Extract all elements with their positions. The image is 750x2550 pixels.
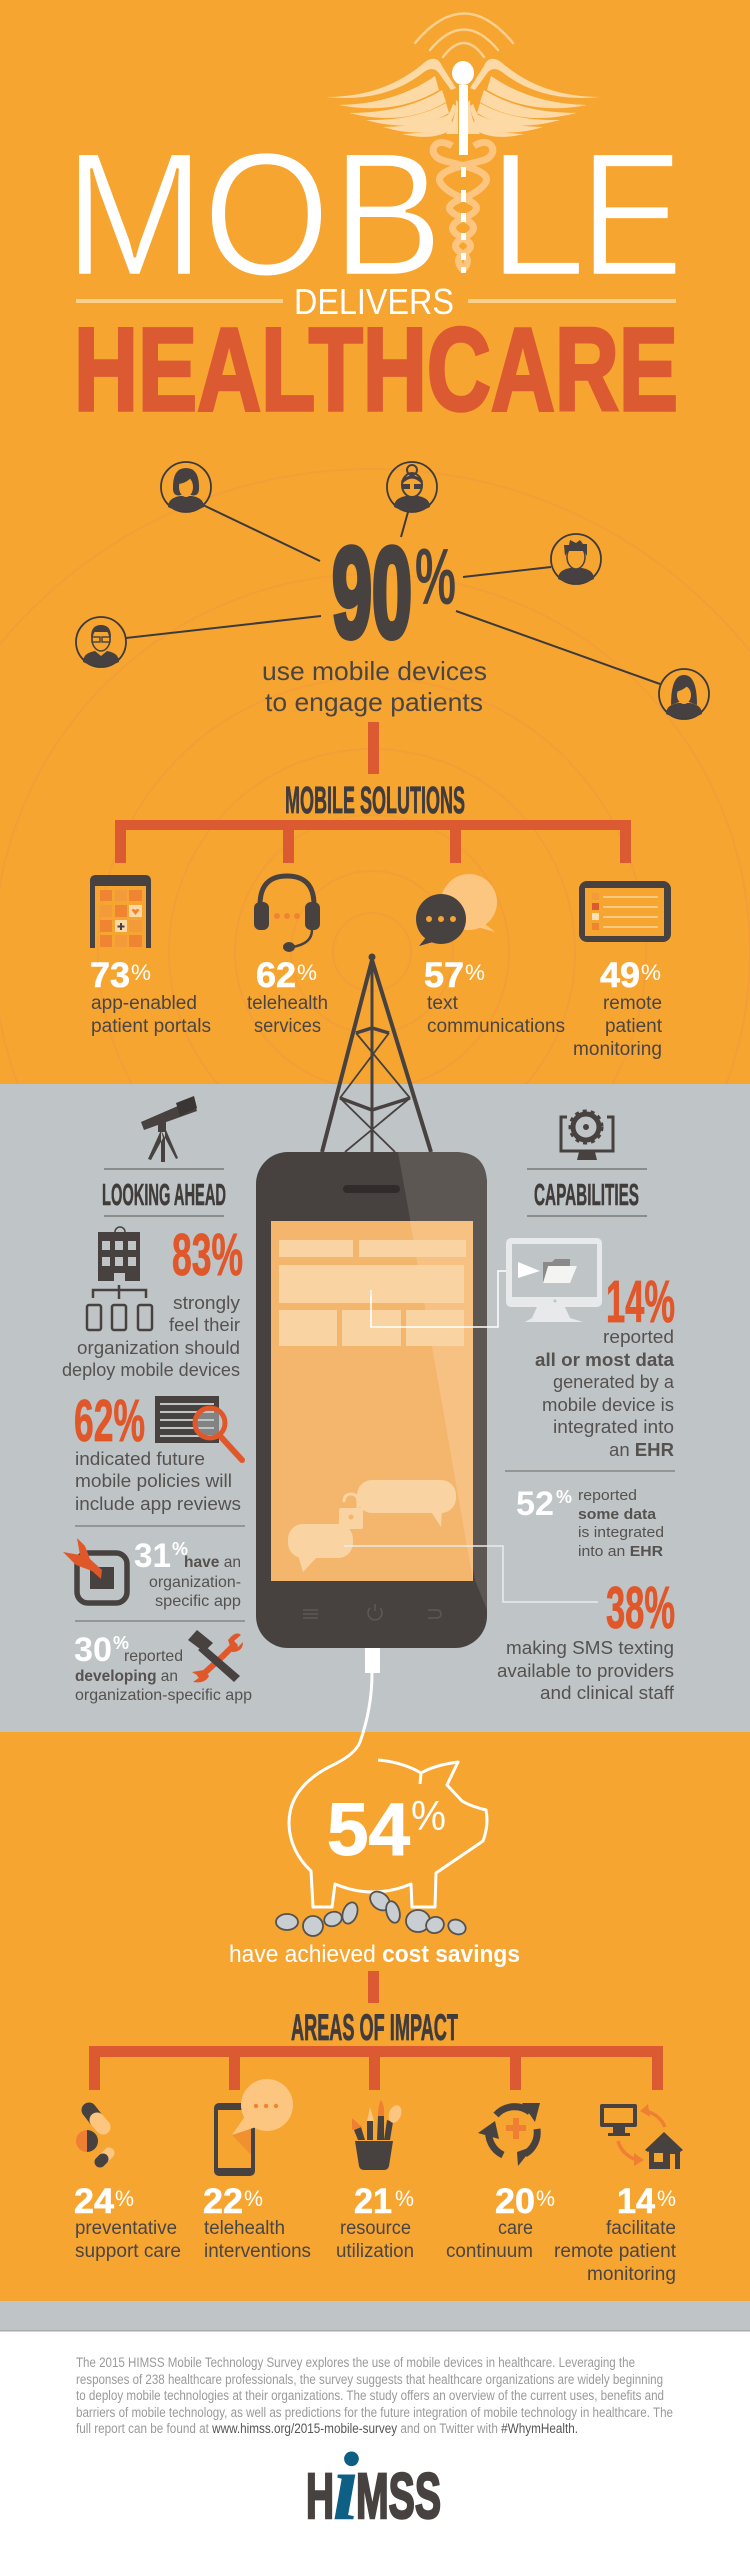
stat: 62% telehealth services (247, 956, 328, 1037)
stat: 30% reported developing: % (113, 1633, 129, 1653)
stat: 24% preventative support care: 24 (74, 2182, 115, 2221)
title: MOBILE DELIVERS HEALTHCARE (64, 117, 683, 436)
stat: 22% telehealth interventions: 22 (203, 2182, 243, 2221)
coins (276, 1888, 468, 1937)
stat: 14% facilitate remote patient monitoring: 14 (617, 2182, 656, 2221)
title: MOBILE DELIVERS HEALTHCARE: L (488, 117, 586, 313)
title: MOBILE DELIVERS HEALTHCARE: O (203, 117, 330, 313)
title: MOBILE DELIVERS HEALTHCARE: DELIVERS (294, 281, 454, 322)
bracket: areas of impact (89, 2046, 663, 2090)
avatar: man with glasses (76, 617, 126, 667)
stat: 57% text communications: 57 (424, 956, 464, 995)
stat: 21% resource utilization: 21 (354, 2182, 392, 2221)
stat: 62% app reviews: 62% (74, 1388, 145, 1454)
stat: 57% text communications: text (427, 993, 459, 1014)
stat: 73% app-enabled patient portals: % (131, 960, 151, 985)
stat: 20% care continuum: 20 (495, 2182, 535, 2221)
stat: 30% reported developing: developing an (75, 1668, 178, 1685)
stat: 52% some data: reported (578, 1487, 637, 1504)
stat: 31% have an app: have an (184, 1554, 241, 1571)
stat: 30% reported developing: 30 (74, 1631, 112, 1669)
stat: 38% SMS texting: 38% (606, 1575, 675, 1641)
stat: 14% facilitate remote patient monitoring: monitoring (587, 2264, 676, 2285)
stat: 24% preventative support care: % (115, 2186, 134, 2211)
stat: 62% app reviews: include app reviews (75, 1494, 241, 1514)
illustration: piggy bank with charger cable (289, 1673, 487, 1907)
stat: 30% reported developing: organization-specific app (75, 1687, 252, 1704)
stat: 38% SMS texting: and clinical staff (540, 1683, 675, 1703)
icon: cup of brushes (352, 2100, 404, 2170)
stat: 54% cost savings: 54 (327, 1788, 410, 1871)
stat: 90% use mobile devices (262, 522, 487, 717)
stat: 52% some data (516, 1485, 664, 1560)
stat: 20% care continuum: care (498, 2218, 533, 2239)
stat: 62% telehealth services: % (297, 960, 317, 985)
stat: 20% care continuum: continuum (446, 2241, 533, 2262)
stat: 83% strongly feel: strongly (173, 1293, 240, 1313)
stat: 52% some data: 52 (516, 1485, 554, 1523)
stat: 49% remote patient monitoring (573, 956, 663, 1060)
stat: 62% telehealth services: telehealth (247, 993, 328, 1014)
stat: 22% telehealth interventions: interventions (204, 2241, 311, 2262)
stat: 21% resource utilization: utilization (336, 2241, 414, 2262)
stat: 62% app reviews: mobile policies will (75, 1471, 232, 1491)
stat: 57% text communications: % (465, 960, 485, 985)
text block: survey description: responses of 238 healthcare professionals, the survey suggests that healthcare organizations are widely beginning (76, 2372, 663, 2387)
stat: 20% care continuum (446, 2182, 555, 2262)
illustration: smartphone (256, 1152, 487, 1673)
icon: caduceus with signal waves (326, 14, 600, 273)
stat: 24% preventative support care (74, 2182, 181, 2262)
stat: 73% app-enabled patient portals (90, 956, 211, 1037)
stat: 83% strongly feel (62, 1222, 243, 1380)
stat: 49% remote patient monitoring: patient (605, 1016, 663, 1037)
stat: 22% telehealth interventions: % (244, 2186, 263, 2211)
stat: 49% remote patient monitoring: monitoring (573, 1039, 662, 1060)
stat: 83% strongly feel: deploy mobile devices (62, 1360, 240, 1380)
connector bar (368, 722, 379, 774)
icon: telescope (141, 1096, 197, 1162)
stat: 31% have an app: organization- (149, 1574, 241, 1591)
stat: 21% resource utilization: resource (340, 2218, 411, 2239)
text block: survey description: barriers of mobile technology, as well as predictions for the future integration of mobile technology in healthcare. The (76, 2405, 673, 2420)
text block: survey description: full report can be found at www.himss.org/2015-mobile-survey and on Twitter with #WhymHealth. (76, 2421, 578, 2436)
stat: 14% facilitate remote patient monitoring: % (657, 2186, 676, 2211)
stat: 38% SMS texting (497, 1575, 675, 1703)
stat: 73% app-enabled patient portals: app-enabled (91, 993, 197, 1014)
stat: 54% cost savings: have achieved cost savings (229, 1941, 520, 1968)
stat: 62% telehealth services: 62 (256, 956, 296, 995)
stat: 30% reported developing (74, 1631, 252, 1704)
heading: capabilities (527, 1169, 647, 1216)
stat: 52% some data: is integrated (578, 1524, 664, 1541)
icon: monitor and home (600, 2104, 683, 2169)
stat: 24% preventative support care: preventative (75, 2218, 177, 2239)
stat: 21% resource utilization (336, 2182, 414, 2262)
stat: 83% strongly feel: 83% (172, 1222, 243, 1288)
stat: 14% all or most data (535, 1269, 675, 1460)
connector lines from 90% to people (126, 505, 660, 684)
avatar: woman with long hair (659, 669, 709, 719)
text: MOBILE SOLUTIONS (285, 780, 465, 822)
icon: radio tower (322, 954, 431, 1152)
stat: 90% use mobile devices: to engage patients (265, 687, 483, 717)
stat: 73% app-enabled patient portals: 73 (90, 956, 130, 995)
stat: 54% cost savings (229, 1788, 520, 1968)
stat: 14% all or most data: mobile device is (542, 1395, 674, 1415)
stat: 62% app reviews (74, 1388, 241, 1514)
stat: 14% facilitate remote patient monitoring (554, 2182, 677, 2285)
stat: 62% app reviews: indicated future (75, 1449, 205, 1469)
stat: 14% facilitate remote patient monitoring: facilitate (606, 2218, 676, 2239)
stat: 30% reported developing: reported (124, 1648, 183, 1665)
stat: 22% telehealth interventions (203, 2182, 311, 2262)
icon: computer monitor with folder (506, 1238, 602, 1322)
text block: survey description: to deploy mobile technologies at their organizations. The study offers an overview of the current uses, benefits and (76, 2388, 664, 2403)
stat: 90% use mobile devices: % (415, 532, 456, 621)
stat: 31% have an app: specific app (155, 1593, 241, 1610)
icon: gear on monitor (561, 1111, 613, 1160)
stat: 22% telehealth interventions: telehealth (204, 2218, 285, 2239)
title: MOBILE DELIVERS HEALTHCARE: M (64, 117, 205, 313)
stat: 14% facilitate remote patient monitoring: remote patient (554, 2241, 677, 2262)
logo: HiMSS: H (306, 2460, 334, 2532)
stat: 57% text communications (424, 956, 565, 1037)
stat: 90% use mobile devices: use mobile devices (262, 656, 487, 686)
stat: 14% all or most data: reported (603, 1327, 674, 1347)
stat: 20% care continuum: % (536, 2186, 555, 2211)
callout lines from phone (344, 1271, 598, 1602)
icon: hammer and wrench (188, 1630, 243, 1682)
logo: HiMSS: MSS (356, 2460, 441, 2532)
stat: 14% all or most data: integrated into (553, 1417, 674, 1437)
stat: 38% SMS texting: available to providers (497, 1661, 674, 1681)
icon: headset (254, 876, 320, 952)
stat: 73% app-enabled patient portals: patient portals (91, 1016, 211, 1037)
avatar: woman with dark hair (161, 462, 211, 512)
icon: hospital network (87, 1227, 152, 1330)
stat: 14% all or most data: an EHR (609, 1440, 674, 1460)
stat: 90% use mobile devices: 90 (332, 522, 412, 665)
stat: 24% preventative support care: support care (75, 2241, 181, 2262)
stat: 52% some data: into an EHR (578, 1543, 663, 1560)
stat: 57% text communications: communications (427, 1016, 565, 1037)
icon: speech bubbles (416, 874, 497, 946)
stat: 31% have an app: 31 (134, 1537, 171, 1575)
bracket: mobile solutions (115, 820, 631, 863)
stat: 21% resource utilization: % (395, 2186, 414, 2211)
stat: 14% all or most data: generated by a (553, 1372, 675, 1392)
icon: care continuum cycle (478, 2103, 540, 2166)
icon: target with dart (63, 1538, 127, 1603)
stat: 49% remote patient monitoring: 49 (600, 956, 640, 995)
logo: HiMSS (306, 2433, 441, 2541)
stat: 52% some data: some data (578, 1506, 657, 1523)
icon: document and magnifier (155, 1396, 242, 1460)
stat: 14% all or most data: 14% (606, 1269, 675, 1335)
stat: 14% all or most data: all or most data (535, 1350, 675, 1370)
avatar: older woman with glasses (387, 462, 437, 512)
logo: HiMSS: i (332, 2433, 359, 2541)
title: MOBILE DELIVERS HEALTHCARE: B (332, 117, 443, 313)
stat: 38% SMS texting: making SMS texting (506, 1638, 674, 1658)
icon: tablet list (579, 881, 671, 942)
stat: 62% telehealth services: services (254, 1016, 321, 1037)
avatar: man with spiky hair (551, 534, 601, 584)
stat: 54% cost savings: % (411, 1792, 446, 1839)
stat: 31% have an app: % (172, 1539, 188, 1559)
heading: capabilities: CAPABILITIES (534, 1177, 639, 1212)
icon: pills (76, 2110, 109, 2162)
stat: 52% some data: % (556, 1487, 572, 1507)
title: MOBILE DELIVERS HEALTHCARE: E (580, 117, 683, 313)
icon: phone with speech bubble (214, 2079, 293, 2176)
stat: 31% have an app (134, 1537, 241, 1610)
text block: survey description: The 2015 HIMSS Mobile Technology Survey explores the use of mobile devices in healthcare. Leveraging the (76, 2355, 635, 2370)
connector bar (368, 1971, 379, 2003)
stat: 49% remote patient monitoring: remote (603, 993, 662, 1014)
heading: looking ahead (102, 1169, 226, 1216)
icon: app phone (90, 875, 151, 948)
stat: 49% remote patient monitoring: % (641, 960, 661, 985)
stat: 83% strongly feel: feel their (169, 1315, 240, 1335)
stat: 83% strongly feel: organization should (77, 1338, 240, 1358)
text: LOOKING AHEAD (102, 1177, 226, 1212)
text block: survey description (76, 2355, 673, 2436)
text: AREAS OF IMPACT (291, 2007, 458, 2048)
